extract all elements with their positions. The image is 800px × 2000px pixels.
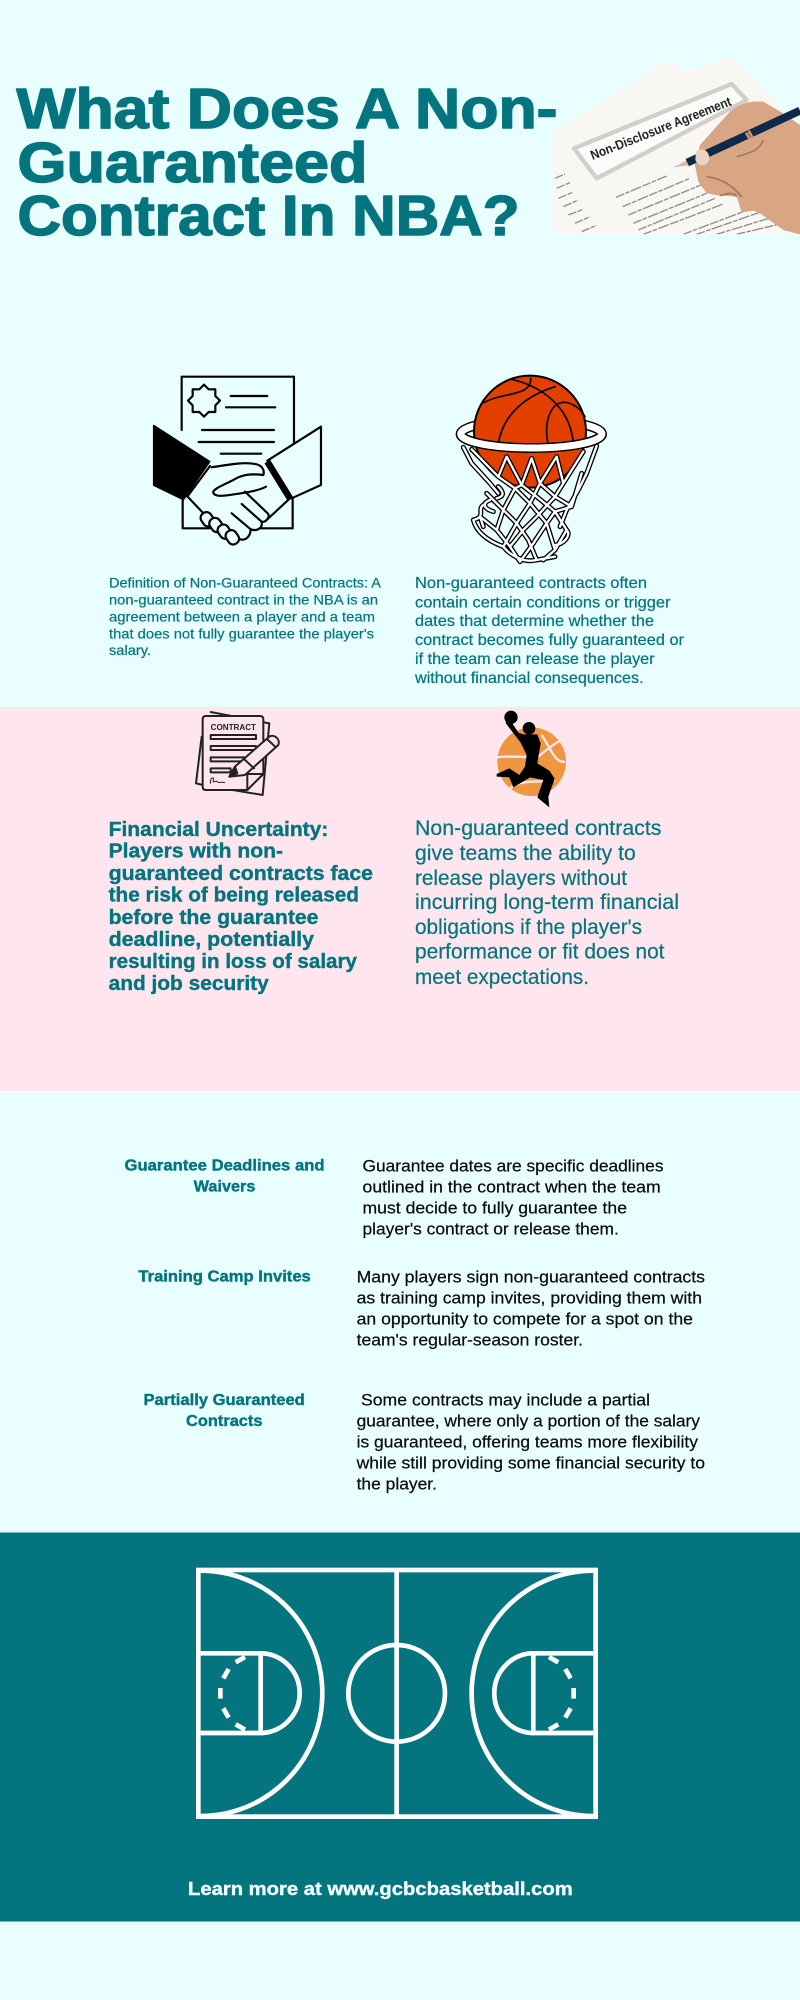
- title: What Does A Non-: [16, 77, 558, 141]
- text: training camp: [357, 1268, 705, 1350]
- text: partial guarantee: Some contracts may include a partial: [361, 1391, 650, 1410]
- text: financial uncertainty: [109, 819, 373, 995]
- text: team flexibility: incurring long-term financial: [415, 890, 679, 914]
- text: definition: agreement between a player and a team: [109, 609, 375, 624]
- icon: basketball in hoop: [461, 376, 602, 562]
- icon: handshake over contract: [154, 377, 321, 547]
- text: financial uncertainty: guaranteed contracts face: [109, 863, 373, 885]
- title: Contract In NBA?: [18, 184, 520, 248]
- heading: guarantee deadlines and waivers: Waivers: [194, 1179, 255, 1196]
- text: financial uncertainty: the risk of being released: [109, 885, 359, 907]
- text: definition: non-guaranteed contract in the NBA is an: [109, 592, 378, 607]
- text: definition: that does not fully guarantee the player's: [109, 626, 374, 641]
- text: trigger dates: Non-guaranteed contracts often: [415, 575, 647, 592]
- text: definition: salary.: [109, 643, 151, 658]
- text: guarantee dates: player's contract or release them.: [362, 1220, 619, 1239]
- text: partial guarantee: guarantee, where only a portion of the salary: [357, 1412, 701, 1431]
- text: financial uncertainty: deadline, potentially: [109, 929, 315, 951]
- text: team flexibility: release players without: [415, 866, 627, 890]
- text: partial guarantee: is guaranteed, offering teams more flexibility: [357, 1433, 699, 1452]
- heading: partially guaranteed contracts: Partially Guaranteed: [144, 1392, 305, 1409]
- text: trigger dates: without financial consequences.: [414, 670, 644, 687]
- text: financial uncertainty: and job security: [109, 973, 270, 995]
- diagram: basketball court: [198, 1570, 596, 1817]
- title: [16, 77, 558, 248]
- heading: guarantee deadlines and waivers: Guarantee Deadlines and: [124, 1158, 325, 1175]
- panel: header: [16, 56, 800, 248]
- text: trigger dates: contain certain conditions or trigger: [415, 594, 670, 611]
- text: partial guarantee: the player.: [357, 1475, 437, 1494]
- heading: partially guaranteed contracts: Contracts: [186, 1413, 263, 1430]
- icon: contract and pen: [196, 712, 279, 795]
- panel: pink band: [0, 707, 800, 1091]
- text: trigger dates: contract becomes fully guaranteed or: [415, 632, 684, 649]
- panel: footer band: [0, 1532, 800, 1922]
- text: guarantee dates: Guarantee dates are specific deadlines: [362, 1157, 664, 1176]
- text: trigger dates: [414, 575, 684, 687]
- text: definition: Definition of Non-Guaranteed Contracts: A: [109, 575, 382, 590]
- text: training camp: as training camp invites, providing them with: [357, 1289, 702, 1308]
- text: guarantee dates: outlined in the contract when the team: [362, 1178, 661, 1197]
- text: team flexibility: meet expectations.: [415, 965, 589, 989]
- text: financial uncertainty: Players with non-: [109, 841, 283, 863]
- text: training camp: Many players sign non-guaranteed contracts: [357, 1268, 705, 1287]
- heading: guarantee deadlines and waivers: [124, 1158, 325, 1196]
- text: guarantee dates: must decide to fully guarantee the: [362, 1199, 627, 1218]
- icon: contract and pen: CONTRACT: [211, 723, 256, 732]
- text: team flexibility: performance or fit does not: [415, 940, 665, 964]
- text: team flexibility: give teams the ability to: [415, 841, 636, 865]
- text: trigger dates: dates that determine whether the: [415, 613, 654, 630]
- text: training camp: team's regular-season roster.: [357, 1331, 583, 1350]
- title: Guaranteed: [18, 131, 368, 195]
- text: definition: [109, 575, 382, 658]
- icon: dunking player over basketball: [497, 711, 566, 807]
- text: team flexibility: [415, 816, 679, 989]
- text: financial uncertainty: Financial Uncertainty:: [109, 819, 328, 841]
- text: partial guarantee: while still providing some financial security to: [356, 1454, 705, 1473]
- panel: details section: [124, 1157, 705, 1494]
- text: guarantee dates: [362, 1157, 664, 1239]
- text: trigger dates: if the team can release the player: [415, 651, 655, 668]
- text: team flexibility: Non-guaranteed contracts: [415, 816, 661, 840]
- text: financial uncertainty: before the guarantee: [109, 907, 318, 929]
- photo: hand signing non-disclosure agreement: [554, 56, 800, 234]
- text: partial guarantee: [356, 1391, 705, 1494]
- footer link text: Learn more at www.gcbcbasketball.com: [188, 1878, 573, 1899]
- text: financial uncertainty: resulting in loss of salary: [109, 951, 358, 973]
- photo: hand signing non-disclosure agreement: Non-Disclosure Agreement: [588, 94, 734, 163]
- heading: training camp invites: Training Camp Invites: [138, 1269, 311, 1286]
- text: training camp: an opportunity to compete for a spot on the: [357, 1310, 693, 1329]
- text: team flexibility: obligations if the player's: [415, 915, 642, 939]
- panel: definition section: [109, 376, 684, 687]
- heading: partially guaranteed contracts: [144, 1392, 305, 1430]
